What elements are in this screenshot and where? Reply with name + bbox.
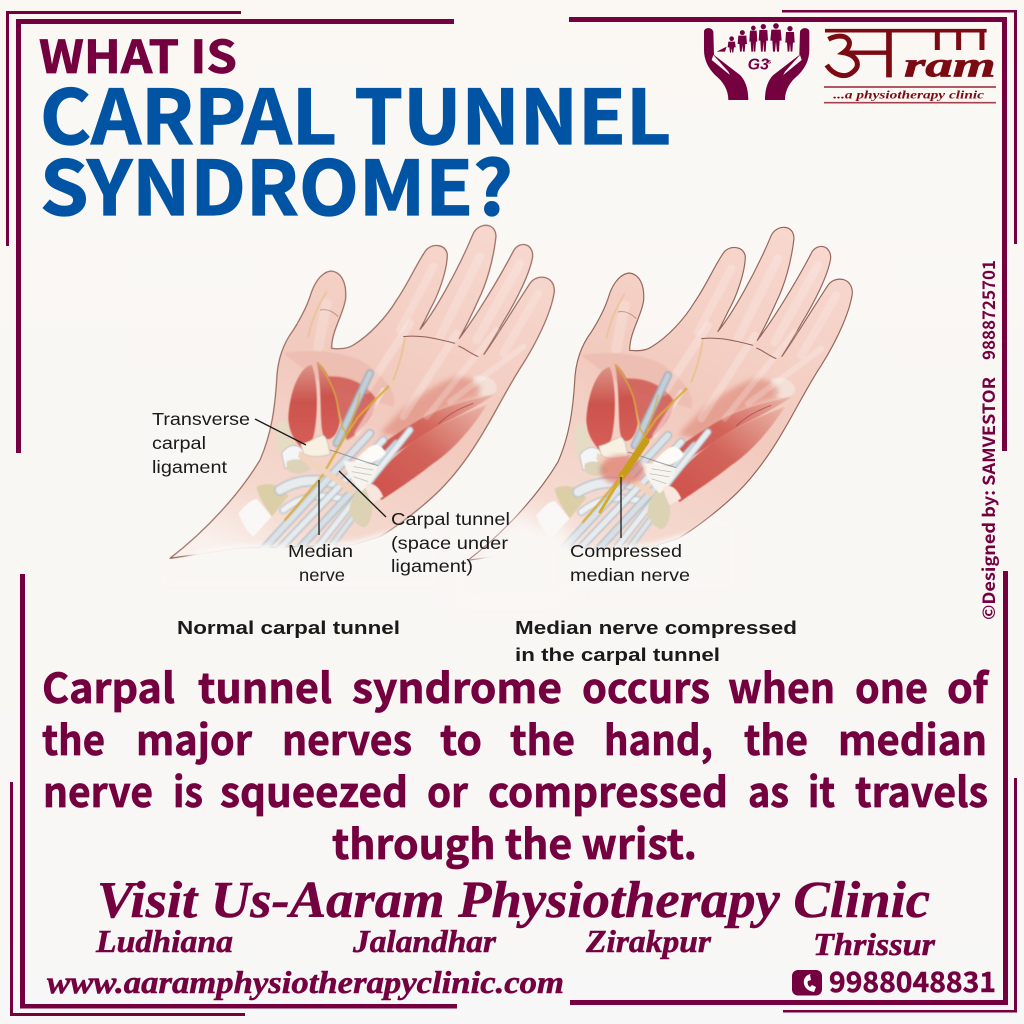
frame: bottom-right corner: [570, 571, 1017, 1012]
definition paragraph: the: [42, 707, 105, 767]
logo wordmark: [824, 31, 996, 103]
definition paragraph: is: [173, 759, 203, 819]
diagram labels: normal tunnel: (space under: [391, 533, 508, 553]
clinic locations: [95, 923, 936, 962]
diagram labels: normal tunnel: carpal: [152, 433, 206, 453]
clinic locations: Zirakpur: [585, 923, 712, 959]
diagram labels: normal tunnel: Transverse: [152, 409, 250, 429]
definition paragraph: squeezed: [220, 759, 408, 819]
icon: hands holding family: G3: [748, 57, 769, 74]
definition paragraph: through the wrist.: [332, 811, 697, 871]
frame: top-left corner: [6, 11, 454, 453]
definition paragraph: one: [855, 655, 928, 715]
diagram labels: compressed tunnel: median nerve: [570, 565, 690, 585]
illustration: compressed hand: [450, 227, 852, 610]
caption: median nerve compressed: [515, 617, 797, 665]
vertical designer credit: [975, 260, 1000, 620]
clinic logo: [704, 23, 996, 103]
logo wordmark: ram: [904, 47, 996, 85]
frame: top-right corner: [569, 10, 1017, 451]
definition paragraph: compressed: [488, 759, 728, 819]
clinic locations: Ludhiana: [95, 923, 233, 959]
definition paragraph: to: [440, 707, 482, 767]
definition paragraph: or: [427, 759, 468, 819]
definition paragraph: the: [744, 707, 808, 767]
definition paragraph: of: [947, 655, 990, 715]
diagram labels: normal tunnel: [152, 409, 510, 585]
caption: median nerve compressed: Median nerve compressed: [515, 617, 797, 638]
clinic locations: Jalandhar: [352, 923, 497, 959]
vertical designer credit: ©Designed by: SAMVESTOR: [975, 377, 1000, 620]
definition paragraph: as: [748, 759, 789, 819]
definition paragraph: the: [510, 707, 575, 767]
definition paragraph: nerves: [282, 707, 412, 767]
title line: syndrome: SYNDROME?: [40, 128, 513, 237]
icon: phone: [792, 970, 822, 996]
diagram labels: normal tunnel: ligament: [152, 457, 227, 477]
title: [39, 21, 671, 237]
illustration: normal hand: [160, 225, 554, 587]
diagram labels: compressed tunnel: [570, 477, 690, 585]
title line: carpal tunnel: CARPAL TUNNEL: [40, 57, 671, 166]
definition paragraph: tunnel: [198, 655, 332, 715]
diagram labels: normal tunnel: nerve: [299, 565, 345, 585]
logo wordmark: ...a physiotherapy clinic: [833, 89, 984, 101]
caption: normal carpal tunnel: Normal carpal tunnel: [177, 617, 400, 638]
definition paragraph: median: [838, 707, 987, 767]
diagram labels: compressed tunnel: Compressed: [570, 541, 682, 561]
website: www.aaramphysiotherapyclinic.com: [47, 964, 564, 1000]
definition paragraph: hand,: [604, 707, 713, 767]
title line: what is: WHAT IS: [39, 21, 237, 86]
caption: median nerve compressed: in the carpal tunnel: [515, 644, 720, 665]
diagram labels: normal tunnel: Median: [288, 541, 353, 561]
diagram labels: normal tunnel: Carpal tunnel: [391, 509, 510, 529]
phone number: 9988048831: [829, 961, 996, 1001]
visit us heading: Visit Us-Aaram Physiotherapy Clinic: [97, 872, 930, 929]
compressed nerve highlight: [600, 441, 646, 512]
definition paragraph: nerve: [43, 759, 153, 819]
frame: bottom-left corner: [10, 574, 457, 1016]
definition paragraph: Carpal: [42, 655, 175, 715]
clinic locations: Thrissur: [813, 926, 936, 962]
definition paragraph: major: [136, 707, 252, 767]
definition paragraph: travels: [855, 759, 988, 819]
definition paragraph: [42, 655, 990, 871]
definition paragraph: syndrome: [352, 655, 562, 715]
definition paragraph: occurs: [582, 655, 710, 715]
icon: hands holding family: [704, 23, 809, 100]
icon: hands holding family: s: [767, 58, 771, 65]
vertical designer credit: 9888725701: [975, 260, 1000, 360]
definition paragraph: when: [728, 655, 835, 715]
diagram labels: normal tunnel: ligament): [391, 556, 473, 576]
definition paragraph: it: [808, 759, 835, 819]
